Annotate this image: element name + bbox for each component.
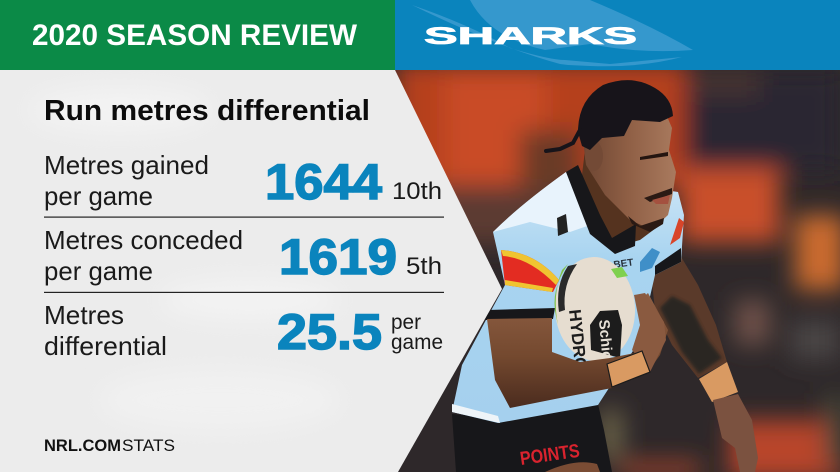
divider [44,292,444,293]
source logo: NRL.COM [44,436,121,455]
shoulder stripe [670,218,684,245]
jersey sponsor: BET [613,257,634,271]
jersey [452,172,684,423]
title: 2020 SEASON REVIEW [32,19,358,52]
divider [44,216,444,218]
jersey maker mark [557,214,568,236]
ear [585,149,603,162]
sleeve band [485,308,555,320]
value: 1619 [279,229,397,285]
label: Metres conceded [44,225,243,255]
panel: stats background [0,70,502,472]
logo: shark watermark [412,0,693,66]
rank: 5th [406,253,442,280]
label: Metres [44,300,124,330]
near hand [632,293,666,372]
heading: Run metres differential [44,95,370,127]
wrist band [607,351,650,387]
label: per game [44,181,153,211]
lips [652,195,670,204]
hair tie [546,130,580,151]
unit: per [391,311,421,334]
background photo: blurred crowd [395,62,840,472]
label: Metres gained [44,150,209,180]
jersey shoulder highlight [493,172,590,232]
hair [578,80,673,150]
rank: 10th [392,178,442,205]
player [452,80,758,472]
row: metres gained [44,150,442,211]
source logo: STATS [122,436,175,455]
value: 25.5 [277,304,382,360]
header bar: blue with Sharks logo [395,0,840,70]
right sleeve edge [655,248,681,275]
far arm [650,250,727,378]
beard and mouth [628,188,672,232]
face [584,118,676,226]
near arm [487,293,668,408]
sleeve sponsor [501,250,559,292]
player leg [545,462,600,472]
source logo [44,436,175,455]
collar [566,165,636,254]
ball: Schick [595,319,616,369]
logo: wordmark: SHARKS [424,23,637,50]
label [44,150,209,211]
label: per game [44,256,153,286]
ball brand: HYDRO [565,308,590,371]
ball [554,257,635,362]
jersey hem [452,404,500,423]
player shorts [452,404,612,472]
ball stripe [554,264,568,325]
header bar: green [0,0,395,70]
neck [582,153,656,242]
value: 1644 [265,154,382,210]
label: differential [44,331,167,361]
team crest [640,248,660,272]
arm tattoo [660,296,722,374]
far hand [713,394,758,472]
ball logo [590,310,622,358]
far wrist band [699,362,738,402]
row: metres conceded [44,225,442,286]
label [44,300,167,361]
row: metres differential [44,300,443,361]
label [44,225,243,286]
unit: game [391,331,443,354]
unit [391,311,443,354]
shorts logo: POINTS [519,441,581,470]
eye [640,152,668,160]
